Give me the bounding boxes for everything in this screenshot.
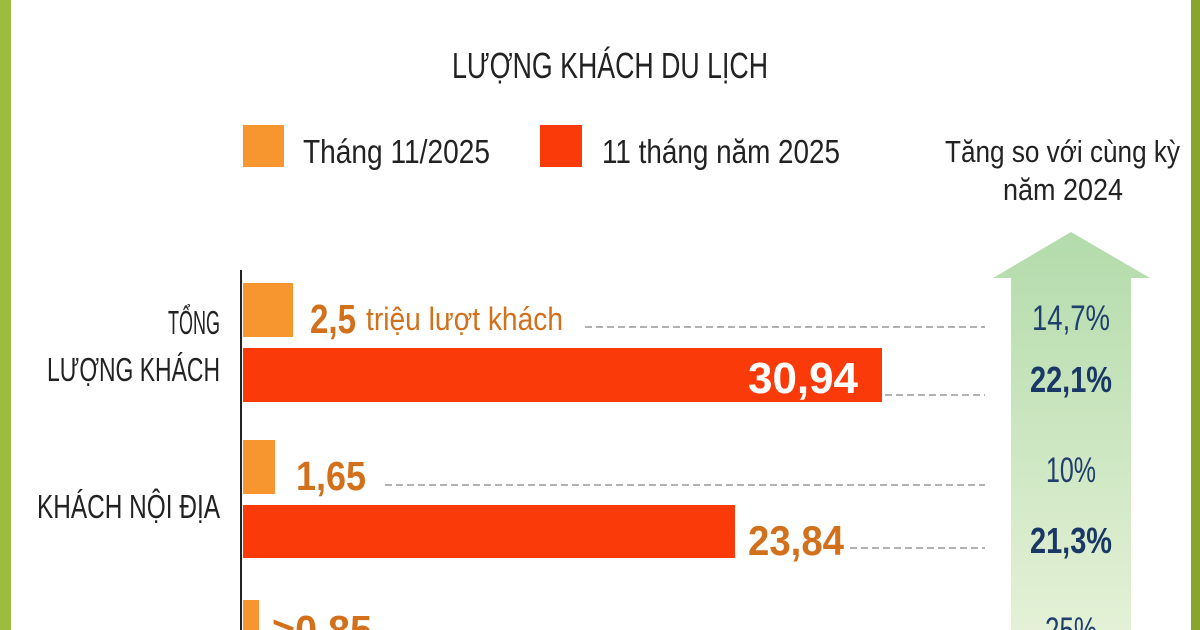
arrow: growth	[993, 232, 1150, 630]
category label: khach noi dia: KHÁCH NỘI ĐỊA	[37, 488, 220, 525]
axis	[240, 270, 242, 630]
category label: tong luong khach: TỔNG	[168, 304, 220, 341]
legend: Tháng 11/2025	[303, 133, 490, 170]
bar: noi dia 11 thang: 23,84	[748, 517, 845, 564]
bar: tong 11 thang: 30,94	[748, 354, 859, 403]
bar: tong thang 11: 2,5	[310, 296, 356, 342]
bar: quoc te thang 11	[243, 600, 372, 630]
left border	[0, 0, 11, 630]
bar: tong thang 11	[243, 283, 563, 342]
bar: noi dia thang 11	[243, 440, 366, 499]
bar: tong 11 thang	[243, 348, 882, 403]
bar: tong thang 11: triệu lượt khách	[366, 301, 563, 337]
arrow: growth: 21,3%	[1030, 520, 1112, 561]
arrow: growth: 22,1%	[1030, 359, 1112, 400]
legend: 11 tháng năm 2025	[602, 133, 840, 170]
comparison header	[945, 134, 1180, 207]
legend	[243, 125, 840, 170]
right border	[1191, 0, 1200, 630]
arrow: growth: 10%	[1046, 451, 1096, 490]
arrow: growth: 14,7%	[1032, 299, 1110, 338]
bar: noi dia thang 11: 1,65	[296, 453, 366, 499]
title: LƯỢNG KHÁCH DU LỊCH	[452, 45, 768, 86]
category label: tong luong khach	[47, 304, 220, 388]
comparison header: năm 2024	[1003, 172, 1123, 207]
bar: noi dia 11 thang	[243, 505, 845, 564]
category label: tong luong khach: LƯỢNG KHÁCH	[47, 351, 220, 388]
